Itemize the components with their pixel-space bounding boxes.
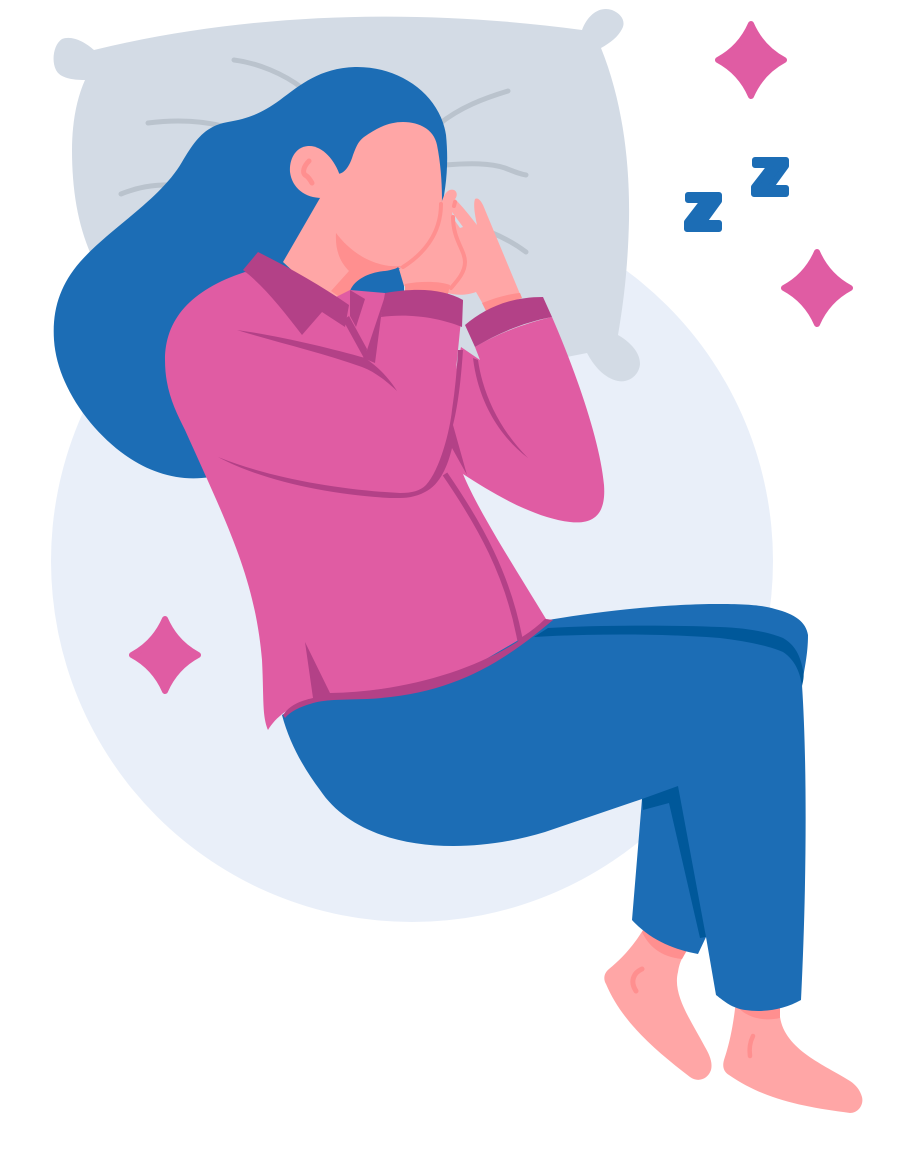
letter z upper xyxy=(754,160,786,194)
sparkle left xyxy=(132,619,198,691)
near sleeve cuff xyxy=(381,290,463,327)
background circle xyxy=(51,200,773,922)
left ankle shadow xyxy=(642,925,690,959)
sleeve inner edge xyxy=(363,296,385,363)
right ankle shadow xyxy=(736,1000,780,1019)
sparkle top right xyxy=(718,24,784,96)
shirt body xyxy=(165,272,553,730)
button placket xyxy=(343,316,367,360)
letter z lower xyxy=(687,195,719,229)
far arm fold xyxy=(473,358,528,458)
hair xyxy=(54,67,447,478)
shirt collar xyxy=(243,252,367,360)
chin and neck shadow xyxy=(331,233,402,303)
shirt chest fold xyxy=(237,330,397,391)
collar right flap xyxy=(350,290,365,327)
left foot xyxy=(604,925,712,1080)
pants xyxy=(282,604,808,1011)
shirt side seam xyxy=(445,474,520,640)
pillow wrinkles xyxy=(121,60,526,252)
pillow xyxy=(54,9,640,390)
hands xyxy=(399,190,522,311)
pants waist fold xyxy=(534,626,804,686)
ear xyxy=(290,146,340,198)
gap between fingers xyxy=(452,212,463,228)
neck and face xyxy=(283,122,442,310)
left ankle mark xyxy=(633,969,642,991)
right ankle mark xyxy=(750,1036,753,1056)
hair behind neck xyxy=(350,267,404,300)
wrist shading xyxy=(405,282,522,311)
shirt hem xyxy=(283,619,553,718)
far sleeve cuff xyxy=(465,297,552,347)
sparkle right xyxy=(784,252,850,324)
ear detail xyxy=(304,161,312,183)
right foot xyxy=(723,1000,862,1113)
sleeve underside line xyxy=(218,350,467,498)
finger lines xyxy=(403,202,465,288)
pants knee fold xyxy=(642,786,706,938)
shirt far arm xyxy=(440,317,604,522)
